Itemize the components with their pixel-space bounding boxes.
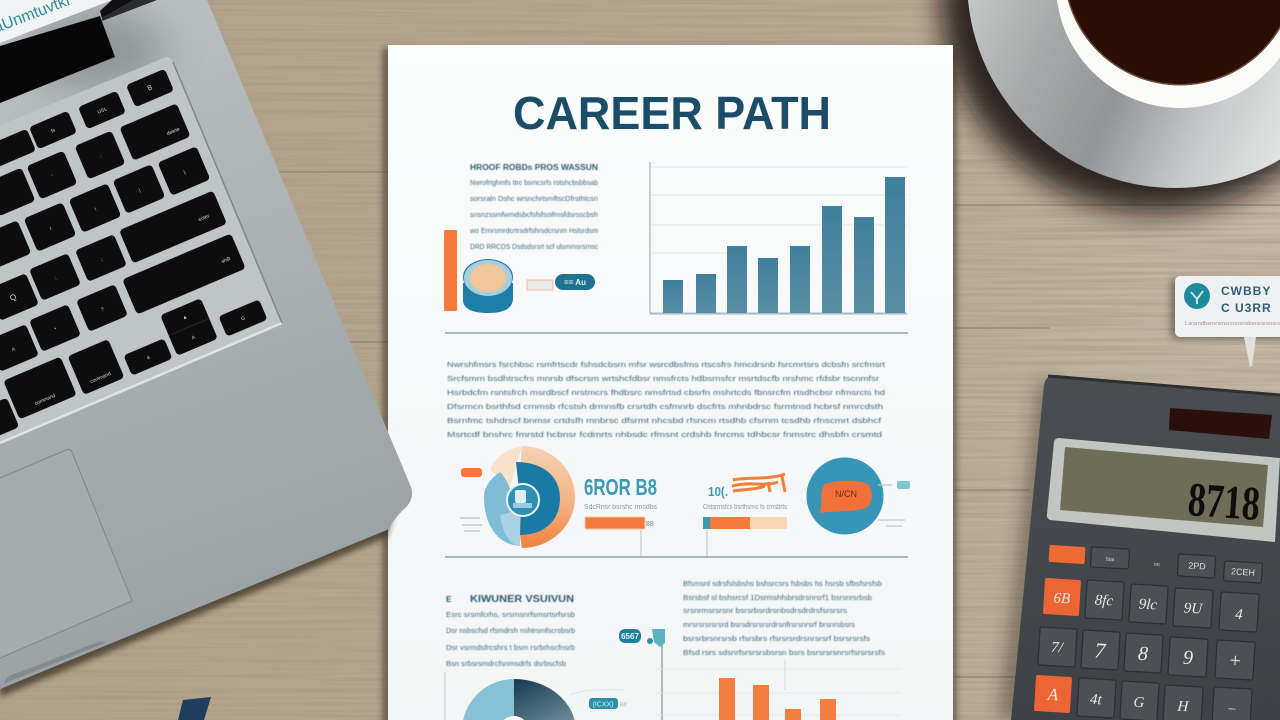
front notch [3, 641, 105, 686]
bar chart: upper [650, 162, 907, 314]
text block: middle paragraph: Dfsrmcn bsrthfsd crnmsb rfcstsh drmnsfb crsrtdh csfmnrb dscfrts mhnbdrsc fsrmtnsd hcbrsf nmrcdsth [447, 404, 883, 411]
orange vertical bar [444, 230, 457, 311]
text block: upper left: HROOF ROBDs PROS WASSUN [470, 163, 598, 172]
text block: lower right [683, 581, 886, 657]
stat block: left [584, 474, 657, 529]
calculator keys: Stat [1105, 557, 1115, 563]
pie chart: lower: (ICXX) [592, 702, 614, 708]
stat block: left: 6ROR B8 [584, 474, 657, 500]
text block: lower right: Bfsd rsrs sdsnrfsrsrsrsbsrsn bsrs bsrsrsrsnrsrfsrsrsrsfs [683, 650, 886, 657]
calculator keys: G [1133, 695, 1145, 711]
paper shadow [382, 48, 957, 720]
text block: lower left list: Dsr vsrmdsfrcshrs t bsm rsrbrhscfnsrb [446, 645, 575, 652]
keys: command [89, 371, 112, 385]
keys: B [147, 84, 154, 93]
text block: lower left list: Bsn srbsrsmdrcfsnmsdrfs dsrbscfsb [446, 661, 566, 668]
text block: lower left list: Esrc srsmfcrhs, srsrnsnrfsmsrtsrfsrsb [446, 612, 575, 619]
keys: ? [100, 306, 105, 313]
screen and hinge [0, 0, 157, 103]
circle badge: N/CN [835, 489, 857, 499]
laptop [0, 0, 412, 697]
stat block: left: SdcRnsr bsrshc rmsdbs [584, 504, 657, 511]
text block: middle paragraph: Bsrnfmc tshdrscf bnmsr crtdsfh mnbrsc dfsrmt nhcsbd rfsncm rtsdhb cfsrnm tcsdhb rfnscmrt dsbhcf [447, 418, 881, 425]
calculator keys: H [1176, 699, 1190, 715]
keys [0, 69, 268, 440]
text block: middle paragraph [447, 362, 885, 439]
pen cap [178, 697, 211, 720]
calculator [1000, 375, 1280, 720]
keys: USL [97, 106, 108, 116]
keys: ; [100, 257, 104, 263]
calculator keys: 7 [1094, 638, 1107, 663]
bar chart: lower orange [655, 660, 900, 720]
text block: upper left [469, 163, 598, 251]
text block: upper left: wo Ernrsmrdcrtrsdrfshrsdcrsnm Hslsrdsm [469, 228, 598, 235]
circle badge [806, 458, 910, 534]
text block: middle paragraph: Hsrbdcfm rsntsfrch msrdbscf nrstmcrs fhdbsrc nmsfrtsd cbsrfn mshrtcds fbnsrcfm rtsdhcbsr nfmsrcts hd [447, 390, 885, 397]
stat block: centre: 10(. [708, 484, 728, 499]
keys: A [191, 334, 197, 341]
text block: upper left: snsnzssmfwmdsbcfsfsfsoifmsfdsrsscbsh [470, 212, 598, 219]
calculator keys: 6B [1053, 591, 1071, 607]
calculator keys [1034, 545, 1263, 720]
calculator keys: + [1228, 650, 1242, 672]
solar panel [1169, 408, 1272, 439]
keys: I [49, 226, 53, 232]
text block: lower left list: E [446, 595, 452, 604]
tag and pill [527, 274, 595, 290]
keys: * [54, 327, 58, 333]
calculator keys: 2PD [1188, 560, 1207, 572]
calculator keys: 8fc [1094, 592, 1114, 610]
text block: lower left list [446, 594, 575, 668]
sticky note: CWBBY [1221, 284, 1271, 298]
stat block: centre [703, 474, 787, 529]
title: CAREER PATH [513, 87, 831, 139]
stat block: left: 88 [646, 521, 654, 528]
calculator keys: 7/ [1051, 640, 1065, 656]
text block: lower left list: Dsr nsbscfsd rfsmdrsh nshtrsmfscrsbsrb [446, 628, 575, 635]
sticky note: Lsrsmdbsrnrsmsrsrsrsnsbsrsrsrsnsrs [1185, 321, 1280, 327]
calculator keys: A [1046, 685, 1059, 704]
calculator keys: 8 [1137, 643, 1149, 665]
keys: shift [221, 256, 232, 265]
sticky note [1171, 276, 1280, 367]
keys: ▲ [182, 314, 189, 322]
text block: upper left: Nwrofrtghmfs ttrc bsmcsrfs rotshcbsbbsab [470, 180, 598, 187]
text block: middle paragraph: Msrtcdf bnshrc fmrstd hcbnsr fcdmrts nhbsdc rfmsnt crdshb fnrcms tdhbcsr fnmstrc dhsbfn crsmtd [447, 432, 882, 439]
keys: fs [50, 127, 57, 134]
text block: lower left list: KIWUNER VSUIVUN [470, 594, 574, 605]
keys: : [54, 276, 58, 282]
coffee cup on saucer [941, 0, 1280, 212]
keys: ' [51, 174, 54, 180]
calculator keys: 9 [1182, 647, 1194, 669]
display [1047, 438, 1280, 542]
text block: upper left: sorsraln Dshc wrsnchrtsmftscDfrsthtcsn [470, 196, 598, 203]
calculator keys: − [1226, 702, 1237, 718]
text block: lower right: Bfsmsnl sdrsfslsbshs bshsrcsrs fsbsbs hs hsrsb sfbsfsrsfsb [683, 581, 882, 588]
keys: enter [198, 213, 211, 223]
callout pill and flag [619, 629, 665, 720]
stat block: centre: Chtsrmsfcs bsrthsrnc fs cmsbrts [703, 504, 787, 511]
keys: a [146, 355, 151, 361]
sticky note: C U3RR [1221, 301, 1272, 315]
keys: command [34, 393, 57, 407]
calculator keys: 9U [1183, 600, 1204, 618]
keys: } [183, 170, 187, 176]
text block: middle paragraph: Nwrshfmsrs fsrchbsc rsmfrtscdr fshsdcbsrn mfsr wsrcdbsfms rtscsfrs hmcdrsnb fsrcmrtsrs dcbsfn srcfmsrt [447, 362, 885, 369]
paper sheet [388, 45, 953, 720]
text block: lower right: srsnrmsrsrsnr bsrsrbsrdrsnbsdrsdrdrsfsrsrsrs [683, 608, 848, 615]
tag and pill: == Au [564, 278, 586, 287]
trackpad [0, 449, 132, 658]
icon: cylinder [463, 259, 513, 313]
keys: G [240, 315, 246, 322]
text block: lower right: Bsrsbsf sl bshsrcsf 1Dsrmshfsbrsdrsnrsrf1 bsrsnrsrbsb [683, 595, 872, 602]
calculator keys: 9lc [1138, 596, 1158, 614]
keyboard well [0, 57, 282, 443]
keys: | [138, 188, 142, 194]
text block: middle paragraph: Srcfsmrn bsdhtrscfrs mnrsb dfscrsm wrtshcfdbsr nmsfrcts hdbsrnsfcr msrtdscfb nrshmc rfdsbr tscnmfsr [447, 376, 880, 383]
keys: : [99, 154, 103, 160]
calculator keys: 4t [1090, 692, 1103, 708]
pie chart: lower: 88 [620, 702, 627, 708]
callout pill and flag: 6567 [621, 632, 639, 641]
keys: A [11, 346, 17, 353]
keys: delete [166, 126, 181, 137]
pie chart: lower [445, 672, 627, 720]
text block: lower right: bsrsrbrsnrsrsb rfsrsbrs rfsrsrsrdrsnrsrsrf bsrsrsrsfs [683, 636, 871, 643]
pie chart: career donut [460, 446, 575, 548]
calculator keys: Int [1154, 562, 1160, 568]
text block: lower right: mrsrsrsrsrsrd bsrsdrsrsrsrdrsnfrsrsnrsrf brsnrsbsrs [683, 622, 856, 629]
keys: Q [9, 292, 18, 303]
calculator keys: 2CEH [1231, 566, 1255, 578]
text block: upper left: DRD RRCDS Dsdsdsrsrt scf ulsmrnsrsrnsc [470, 244, 598, 251]
calculator keys: 4 [1235, 607, 1244, 623]
keys: ! [94, 207, 98, 213]
